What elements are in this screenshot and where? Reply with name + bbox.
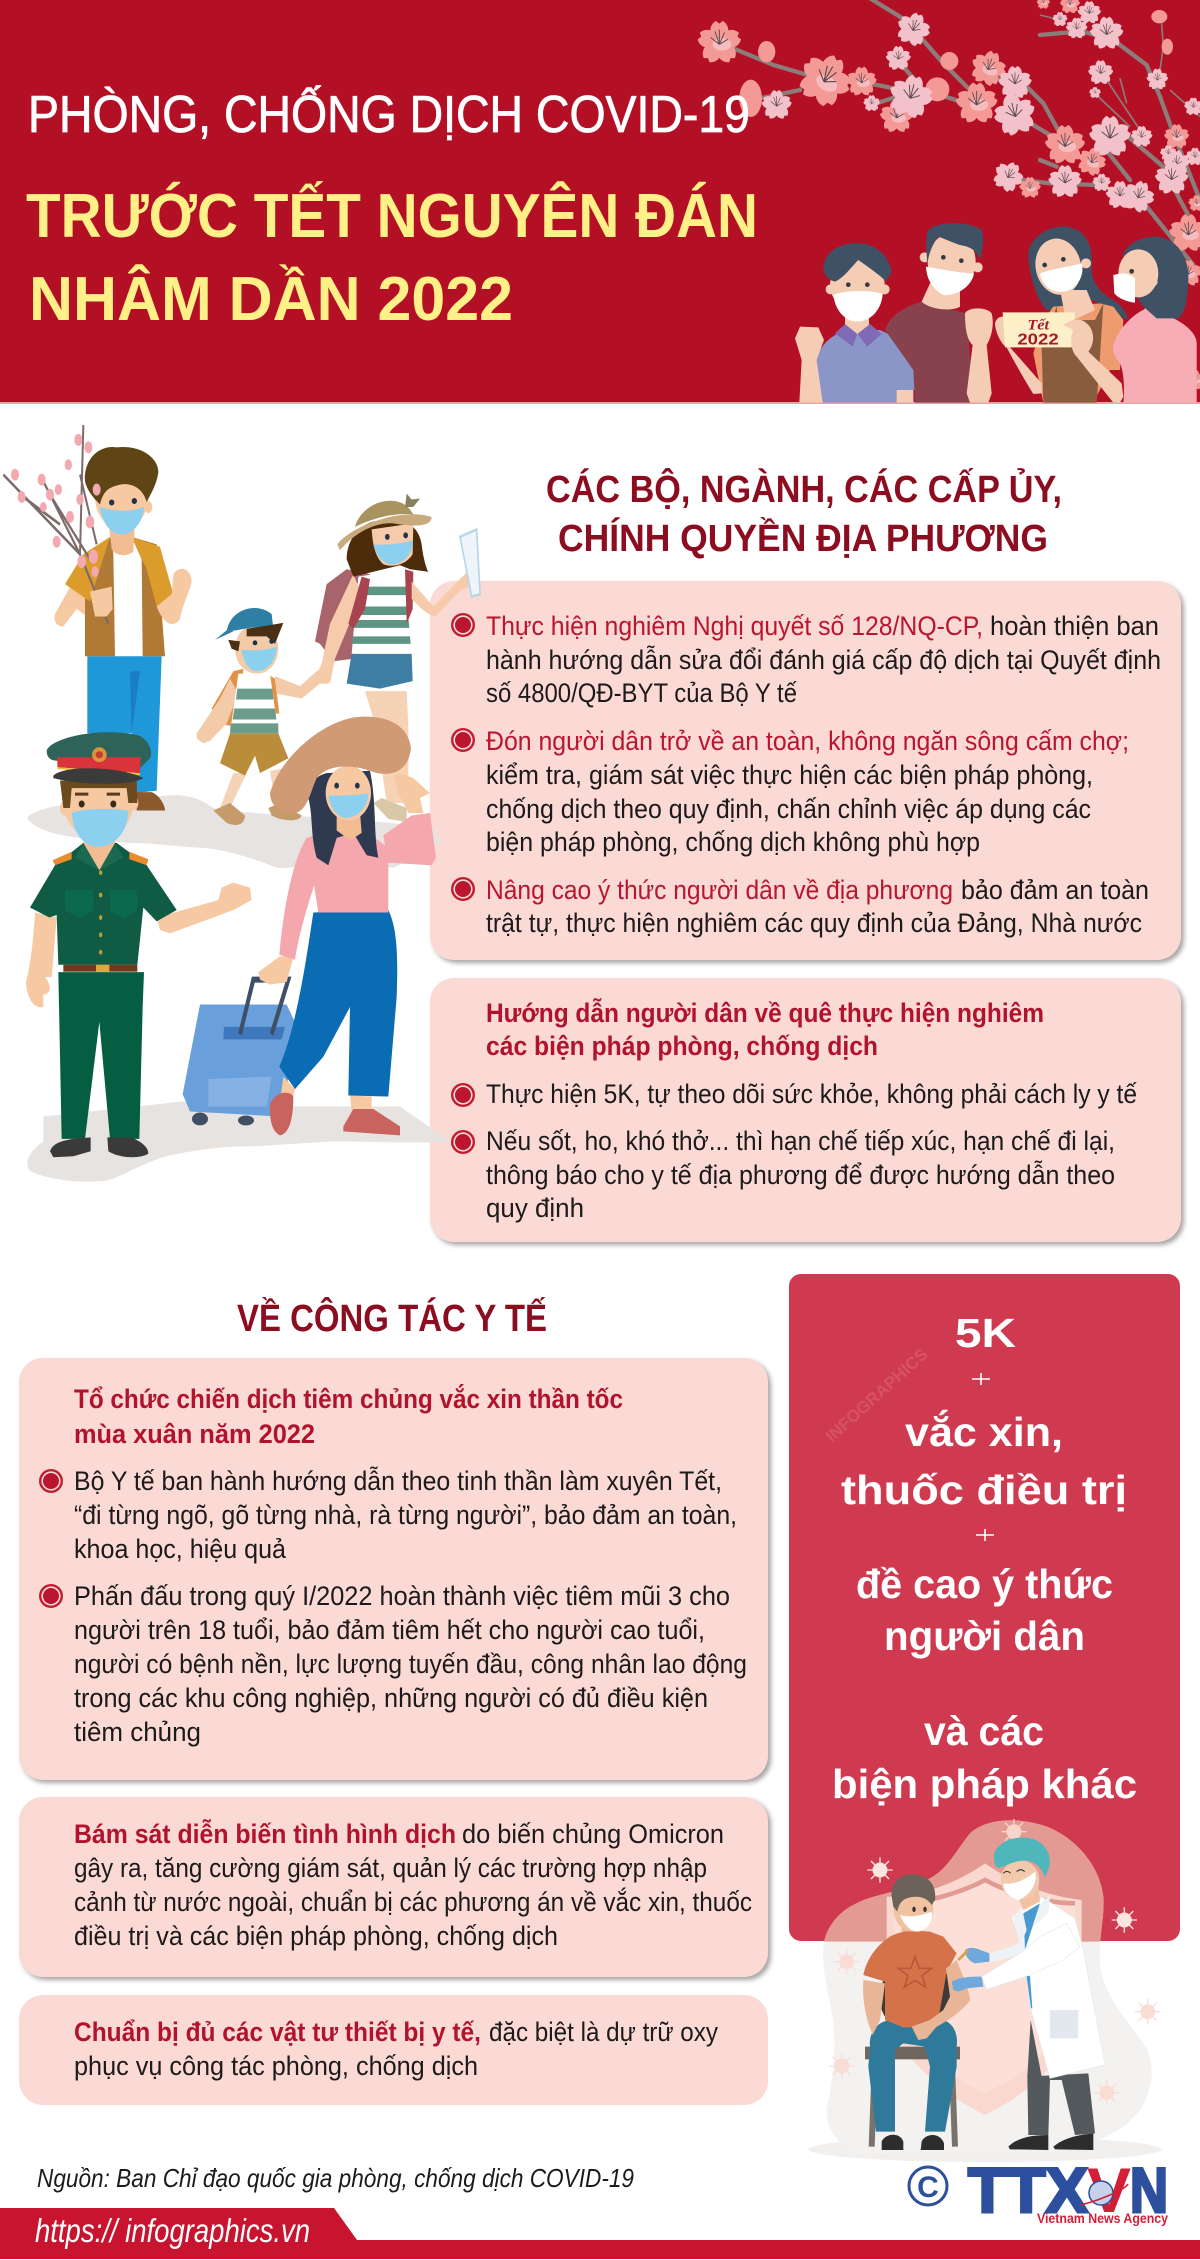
- source line: Nguồn: Ban Chỉ đạo quốc gia phòng, chống dịch COVID-19: [37, 2163, 634, 2193]
- bullet 3: trật tự, thực hiện nghiêm các quy định của Đảng, Nhà nước: [486, 908, 1142, 938]
- bullet 2: biện pháp phòng, chống dịch không phù hợp: [486, 827, 980, 857]
- person: man in maroon shirt: [885, 223, 993, 403]
- doctor: [952, 1837, 1105, 2150]
- title line: yellow 2: NHÂM DẦN 2022: [29, 265, 513, 334]
- header banner: [0, 0, 1200, 404]
- panel: vaccination campaign: [19, 1358, 771, 1783]
- panel: monitoring the outbreak: điều trị và các biện pháp phòng, chống dịch: [74, 1921, 558, 1951]
- message text: vắc xin,: [905, 1409, 1063, 1455]
- panel: monitoring the outbreak: do biến chủng Omicron: [462, 1819, 724, 1849]
- ground shadow lower: [27, 1102, 450, 1182]
- bullet 1: hành hướng dẫn sửa đổi đánh giá cấp độ dịch tại Quyết định: [486, 644, 1161, 675]
- bullet 3: bảo đảm an toàn: [961, 875, 1149, 905]
- bullet 2: người có bệnh nền, lực lượng tuyến đầu, công nhân lao động: [74, 1649, 747, 1679]
- figure: soldier: [26, 732, 252, 1157]
- panel: monitoring the outbreak: gây ra, tăng cường giám sát, quản lý các trường hợp nhập: [74, 1853, 707, 1883]
- bullet 2: Phấn đấu trong quý I/2022 hoàn thành việc tiêm mũi 3 cho: [74, 1581, 730, 1611]
- bullet 1: Thực hiện nghiêm Nghị quyết số 128/NQ-CP,: [486, 611, 983, 641]
- panel heading: Tổ chức chiến dịch tiêm chủng vắc xin thần tốc: [74, 1383, 623, 1414]
- icon: copyright mark: [909, 2167, 947, 2205]
- logo: TTXVN: Vietnam News Agency: [1037, 2210, 1168, 2226]
- illustration: vaccination scene: [808, 1819, 1162, 2162]
- bullet 3: [451, 875, 1149, 938]
- bullet 1: Bộ Y tế ban hành hướng dẫn theo tinh thần làm xuyên Tết,: [74, 1465, 722, 1496]
- title line: yellow 1: TRƯỚC TẾT NGUYÊN ĐÁN: [26, 182, 758, 251]
- bullet 2: người trên 18 tuổi, bảo đảm tiêm hết cho người cao tuổi,: [74, 1615, 705, 1645]
- bullet 1: khoa học, hiệu quả: [74, 1534, 287, 1564]
- ground: [808, 2137, 1162, 2162]
- bullet 1: hoàn thiện ban: [990, 611, 1159, 641]
- bullet 2: [39, 1581, 747, 1747]
- heading: health work: VỀ CÔNG TÁC Y TẾ: [237, 1295, 547, 1340]
- bullet 2: Đón người dân trở về an toàn, không ngăn sông cấm chợ;: [486, 726, 1129, 756]
- panel: monitoring the outbreak: cảnh từ nước ngoài, chuẩn bị các phương án về vắc xin, thuốc: [74, 1886, 752, 1917]
- panel: medical supplies: Chuẩn bị đủ các vật tư thiết bị y tế,: [74, 2017, 481, 2047]
- background blob: [823, 1820, 1152, 2153]
- bullet 1: [451, 611, 1161, 708]
- panel: medical supplies: phục vụ công tác phòng, chống dịch: [74, 2051, 478, 2081]
- logo: TTXVN: V: [1087, 2156, 1131, 2226]
- bullet 2: trong các khu công nghiệp, những người có đủ điều kiện: [74, 1683, 708, 1713]
- bullet 3: Nâng cao ý thức người dân về địa phương: [486, 875, 953, 905]
- panel: authorities' tasks: [430, 581, 1184, 963]
- illustration: four masked people: [795, 223, 1197, 403]
- title line: white: PHÒNG, CHỐNG DỊCH COVID-19: [28, 85, 750, 144]
- sign: [1003, 312, 1075, 348]
- heading: authorities: CHÍNH QUYỀN ĐỊA PHƯƠNG: [558, 516, 1048, 560]
- bullet 1: số 4800/QĐ-BYT của Bộ Y tế: [486, 678, 797, 708]
- logo: TTXVN: N: [1130, 2156, 1168, 2226]
- heading: authorities: [546, 466, 1062, 560]
- panel: medical supplies: đặc biệt là dự trữ oxy: [489, 2017, 718, 2047]
- panel: medical supplies: [19, 1995, 768, 2105]
- footer band: https:// infographics.vn: [35, 2212, 310, 2249]
- person: woman holding sign: [995, 227, 1128, 403]
- bullet 2: [451, 726, 1129, 857]
- panel heading: Hướng dẫn người dân về quê thực hiện nghiêm: [486, 997, 1044, 1028]
- sign: Tết: [1027, 317, 1050, 333]
- bullet 2: tiêm chủng: [74, 1717, 201, 1747]
- bullet 1: Thực hiện 5K, tự theo dõi sức khỏe, không phải cách ly y tế: [486, 1079, 1137, 1109]
- bullet 1: “đi từng ngõ, gõ từng nhà, rà từng người”, bảo đảm an toàn,: [74, 1500, 737, 1530]
- message text: [832, 1310, 1137, 1807]
- sign: 2022: [1017, 331, 1059, 348]
- panel: guidance for returning residents: [430, 978, 1184, 1245]
- message text: biện pháp khác: [832, 1761, 1137, 1807]
- message text: người dân: [884, 1613, 1085, 1659]
- bullet 2: Nếu sốt, ho, khó thở... thì hạn chế tiếp xúc, hạn chế đi lại,: [486, 1126, 1115, 1156]
- watermark: INFOGRAPHICS: [822, 1345, 932, 1446]
- panel heading: các biện pháp phòng, chống dịch: [486, 1031, 878, 1061]
- bullet 1: [39, 1465, 737, 1564]
- message text: đề cao ý thức: [856, 1561, 1113, 1607]
- panel heading: [486, 997, 1044, 1061]
- logo: TTXVN: TTX: [968, 2156, 1088, 2226]
- ground shadow upper: [27, 795, 442, 868]
- shield: [887, 1863, 1082, 2115]
- figure: man with blossom branch: [3, 425, 192, 810]
- bullet 2: thông báo cho y tế địa phương để được hướng dẫn theo: [486, 1159, 1115, 1190]
- icon: blossom branches: [696, 0, 1200, 391]
- message text: 5K: [955, 1310, 1016, 1356]
- panel heading: [74, 1383, 623, 1449]
- figure: child with cap: [197, 608, 332, 825]
- illustration: travellers and soldier: [3, 425, 480, 1182]
- logo: TTXVN: [909, 2156, 1168, 2226]
- message text: và các: [924, 1708, 1044, 1754]
- footer band: [0, 2208, 1200, 2259]
- panel: monitoring the outbreak: [19, 1797, 771, 1980]
- patient: [863, 1874, 970, 2150]
- bullet 2: [451, 1126, 1115, 1223]
- figure: woman with small hat: [315, 494, 480, 822]
- panel: 5K message: [789, 1274, 1180, 1941]
- figure: woman with suitcase: [183, 717, 436, 1135]
- person: woman in pink: [1113, 237, 1197, 403]
- panel heading: mùa xuân năm 2022: [74, 1419, 315, 1449]
- bullet 2: chống dịch theo quy định, chấn chỉnh việc áp dụng các: [486, 794, 1091, 824]
- bullet 2: kiểm tra, giám sát việc thực hiện các biện pháp phòng,: [486, 760, 1093, 790]
- heading: authorities: CÁC BỘ, NGÀNH, CÁC CẤP ỦY,: [546, 466, 1062, 511]
- icon: virus particles: [829, 1819, 1160, 2105]
- panel: monitoring the outbreak: Bám sát diễn biến tình hình dịch: [74, 1818, 456, 1849]
- icon: copyright mark: C: [917, 2171, 939, 2204]
- message text: thuốc điều trị: [841, 1467, 1127, 1513]
- person: man in blue shirt: [795, 243, 918, 403]
- branch in hand: [3, 425, 108, 624]
- bullet 2: quy định: [486, 1193, 584, 1223]
